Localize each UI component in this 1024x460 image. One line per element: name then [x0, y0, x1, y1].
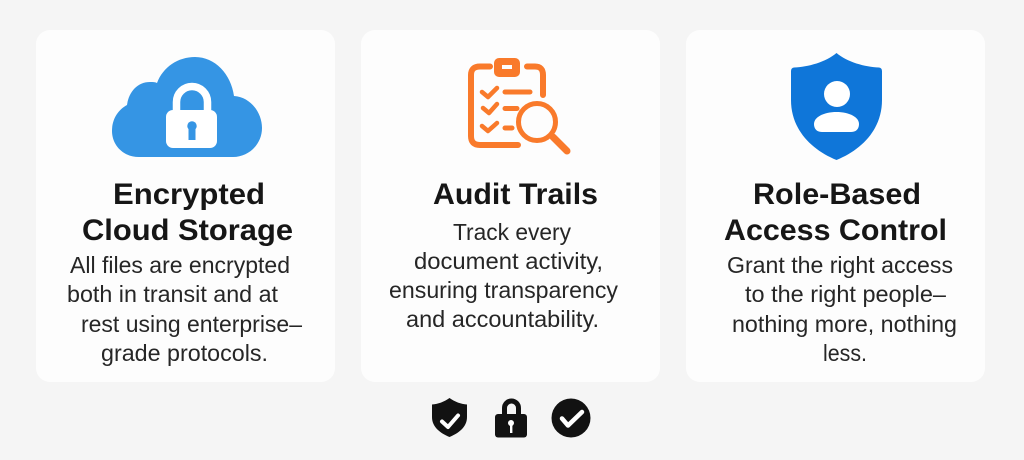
text: audit trails description [389, 219, 618, 332]
heading: audit trails: Audit Trails [433, 178, 598, 211]
text: audit trails description: ensuring transparency [389, 277, 618, 303]
text: audit trails description: and accountability. [406, 306, 599, 332]
text: audit trails description: Track every [453, 219, 571, 245]
text: encrypted cloud storage description: rest using enterprise– [81, 311, 302, 337]
text: encrypted cloud storage description [67, 252, 302, 366]
text: role-based access control description: less. [823, 340, 867, 366]
icon: shield with person [791, 53, 882, 160]
text: encrypted cloud storage description: grade protocols. [101, 340, 268, 366]
text: role-based access control description: to the right people– [745, 281, 946, 307]
panel: role-based access control [686, 30, 985, 382]
text: audit trails description: document activity, [414, 248, 603, 274]
heading: encrypted cloud storage: Encrypted [113, 178, 265, 211]
heading: encrypted cloud storage [82, 178, 293, 247]
text: role-based access control description: nothing more, nothing [732, 311, 957, 337]
panel: audit trails [361, 30, 660, 382]
icon: cloud with padlock [112, 57, 262, 157]
text: encrypted cloud storage description: All files are encrypted [70, 252, 290, 278]
text: encrypted cloud storage description: both in transit and at [67, 281, 279, 307]
icon: shield with check [432, 398, 467, 437]
icon: circled check [552, 398, 590, 438]
icon: clipboard checklist with magnifier [471, 58, 567, 151]
heading: role-based access control: Role-Based [753, 178, 921, 211]
text: role-based access control description: Grant the right access [727, 252, 953, 278]
panel: encrypted cloud storage [36, 30, 335, 382]
icon: padlock [495, 401, 527, 438]
text: role-based access control description [727, 252, 957, 366]
heading: role-based access control [724, 178, 947, 247]
heading: role-based access control: Access Control [724, 214, 947, 247]
heading: encrypted cloud storage: Cloud Storage [82, 214, 293, 247]
icon row: security badges [432, 398, 590, 438]
